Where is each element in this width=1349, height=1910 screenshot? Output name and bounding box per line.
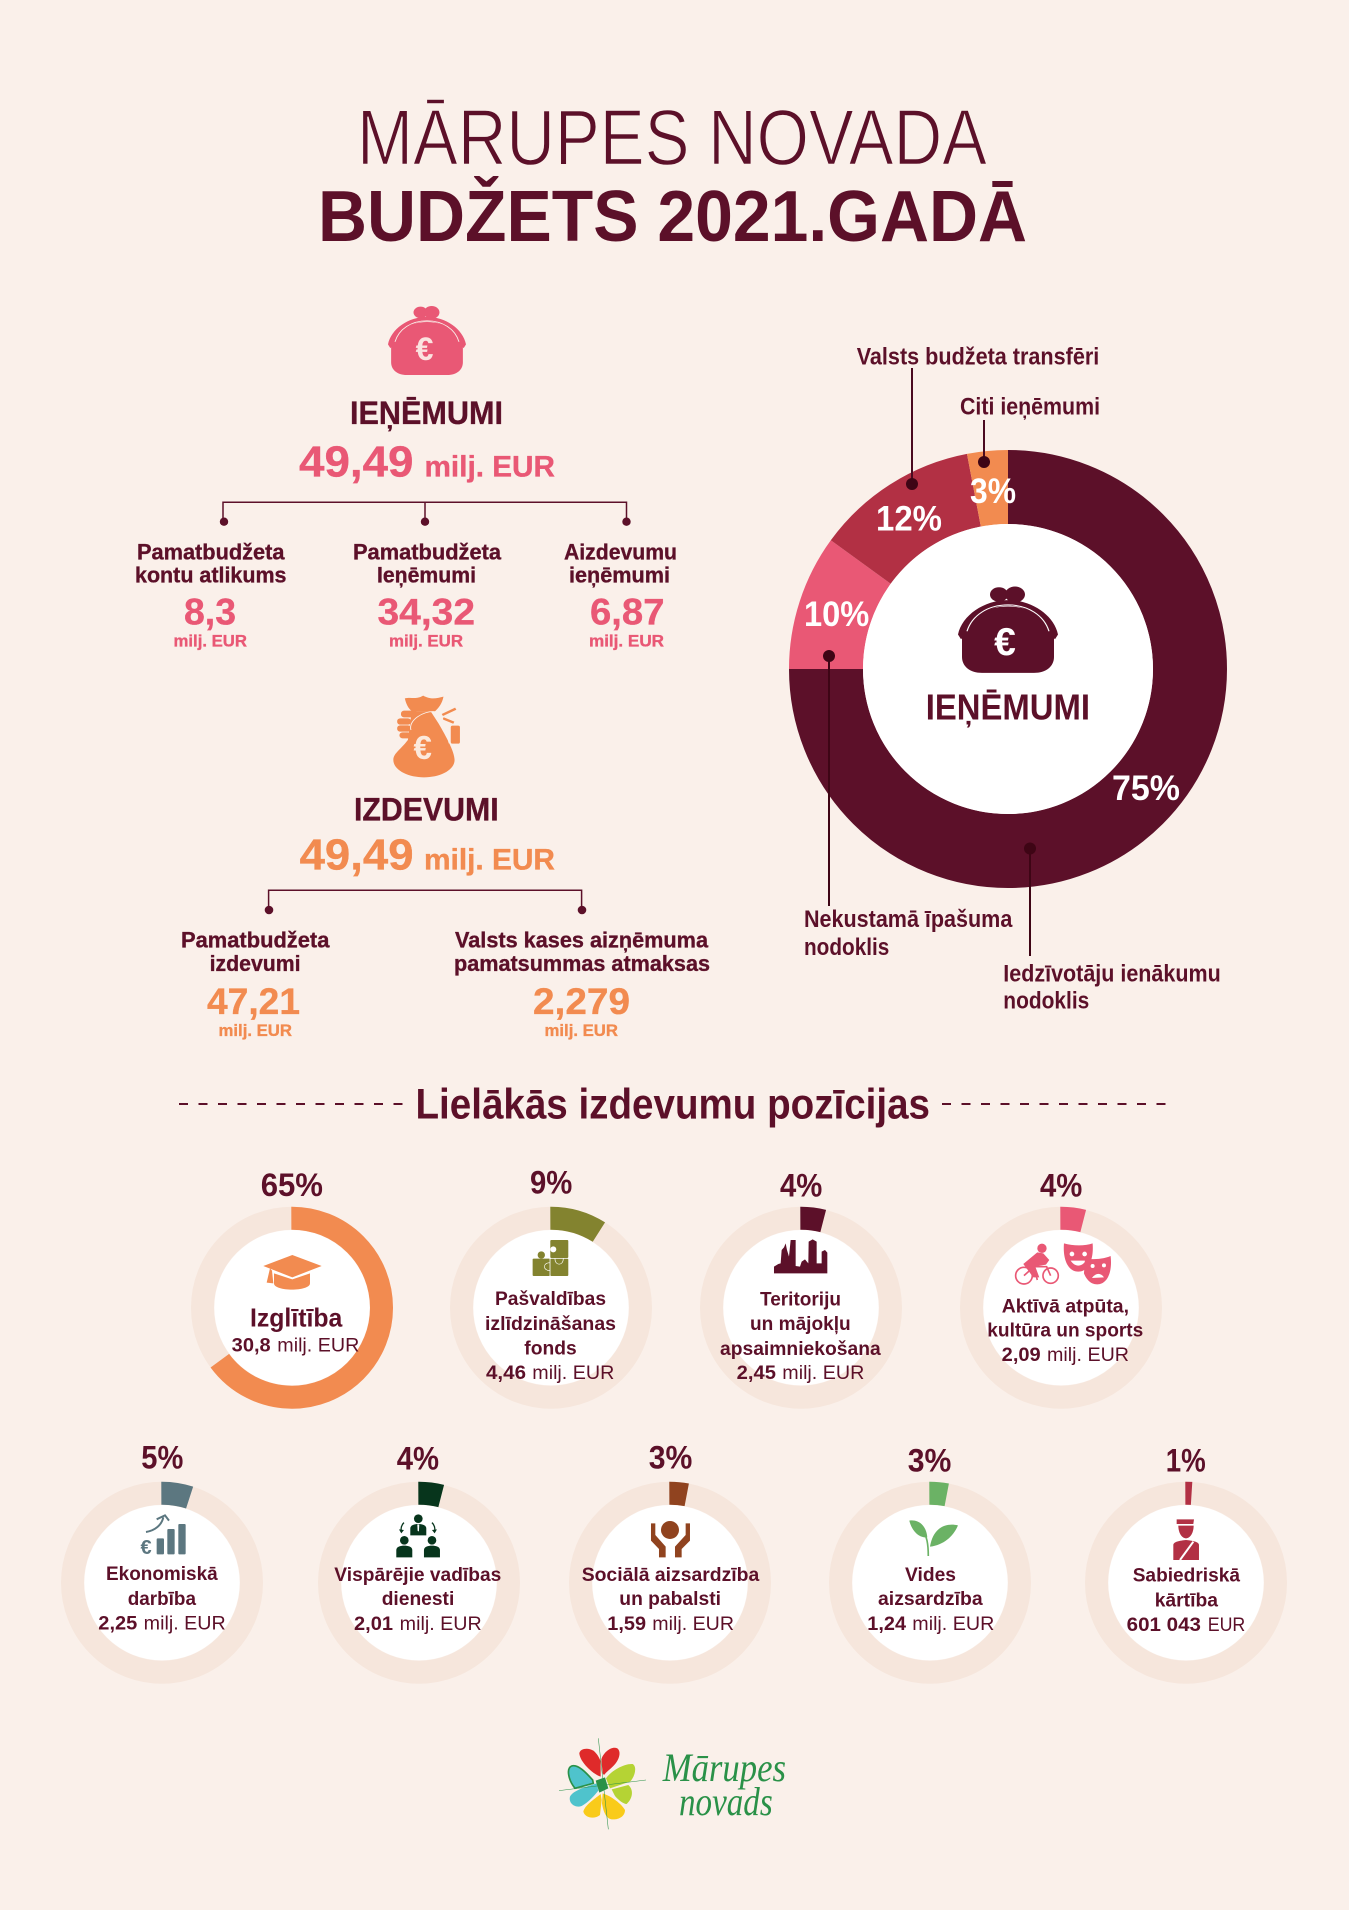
ring: education 65%: Izglītība bbox=[250, 1303, 343, 1333]
expenditure item: treasury loan repayment: Valsts kases aizņēmuma bbox=[455, 928, 709, 953]
icon: money bag bbox=[393, 696, 460, 777]
revenue total: 49,49 bbox=[299, 438, 414, 487]
expenditure tree connector bbox=[265, 890, 586, 914]
ring: environmental protection 3%: aizsardzība bbox=[878, 1588, 983, 1610]
ring: territory and housing 4%: apsaimniekošana bbox=[720, 1338, 881, 1360]
segment percentages bbox=[804, 472, 1180, 808]
ring: equalisation fund 9% bbox=[462, 1164, 640, 1397]
icon: team of people bbox=[396, 1514, 440, 1557]
callout: other revenue: Citi ieņēmumi bbox=[960, 394, 1100, 421]
segment percentages: 12% bbox=[876, 500, 942, 539]
ring: equalisation fund 9%: 9% bbox=[530, 1164, 572, 1200]
revenue item: account balance: Pamatbudžeta bbox=[137, 539, 285, 564]
ring: recreation, culture and sport 4% bbox=[972, 1168, 1150, 1397]
icon: money bag: € bbox=[414, 729, 432, 766]
icon: dark purse: € bbox=[994, 621, 1016, 664]
revenue item: base budget: milj. EUR bbox=[389, 633, 463, 651]
ring: recreation, culture and sport 4%: milj. EUR bbox=[1047, 1344, 1129, 1366]
revenue item: loans: milj. EUR bbox=[589, 633, 664, 651]
ring: general government services 4%: 4% bbox=[397, 1440, 439, 1476]
callout: property tax: nodoklis bbox=[804, 934, 889, 961]
ring: economic activity 5%: 2,25 bbox=[98, 1612, 137, 1634]
panel: revenue summary bbox=[135, 306, 677, 651]
ring: economic activity 5%: Ekonomiskā bbox=[106, 1563, 218, 1585]
ring: general government services 4%: dienesti bbox=[382, 1588, 454, 1610]
expenditure total: 49,49 bbox=[300, 830, 414, 879]
icon: euro growth chart bbox=[140, 1515, 186, 1559]
ring: public order 1%: 601 043 bbox=[1127, 1614, 1201, 1636]
ring: territory and housing 4%: 4% bbox=[780, 1168, 822, 1204]
ring: economic activity 5%: milj. EUR bbox=[144, 1612, 226, 1634]
expenditure item: treasury loan repayment: pamatsummas atmaksas bbox=[454, 951, 710, 976]
icon: plant sprout bbox=[909, 1520, 958, 1556]
revenue item: account balance: kontu atlikums bbox=[135, 563, 286, 588]
expenditure item: treasury loan repayment bbox=[454, 928, 710, 1040]
heading: expenditure: IZDEVUMI bbox=[354, 792, 499, 828]
callout: state transfers bbox=[857, 344, 1099, 490]
ring: general government services 4%: milj. EUR bbox=[400, 1613, 482, 1635]
callout: income tax bbox=[1003, 842, 1221, 1014]
ring: social protection 3%: 3% bbox=[649, 1439, 692, 1475]
ring: environmental protection 3%: 1,24 bbox=[867, 1613, 906, 1635]
icon: graduation cap bbox=[263, 1255, 322, 1290]
ring: environmental protection 3% bbox=[840, 1443, 1020, 1672]
icon: puzzle bbox=[533, 1240, 568, 1276]
panel: revenue donut chart bbox=[804, 344, 1221, 1014]
panel: expenditure summary bbox=[181, 696, 710, 1040]
ring: recreation, culture and sport 4%: Aktīvā atpūta, bbox=[1002, 1295, 1129, 1317]
donut centre bbox=[863, 524, 1153, 814]
revenue item: base budget: 34,32 bbox=[378, 590, 475, 632]
callout: other revenue bbox=[960, 394, 1100, 468]
ring: recreation, culture and sport 4%: kultūra un sports bbox=[987, 1320, 1143, 1342]
ring: environmental protection 3%: 3% bbox=[908, 1443, 951, 1479]
revenue item: account balance: milj. EUR bbox=[174, 633, 247, 651]
logo wordmark bbox=[662, 1745, 786, 1824]
expenditure item: treasury loan repayment: 2,279 bbox=[533, 980, 630, 1022]
ring: economic activity 5%: darbība bbox=[128, 1588, 196, 1610]
ring: recreation, culture and sport 4%: 2,09 bbox=[1002, 1344, 1041, 1366]
expenditure item: base budget: milj. EUR bbox=[218, 1022, 292, 1040]
ring: social protection 3%: Sociālā aizsardzība bbox=[582, 1564, 759, 1586]
revenue item: loans: ieņēmumi bbox=[569, 563, 670, 588]
ring: education 65% bbox=[202, 1167, 382, 1397]
revenue item: base budget: Pamatbudžeta bbox=[353, 539, 502, 564]
ring: economic activity 5% bbox=[72, 1439, 252, 1672]
heading: revenue: IEŅĒMUMI bbox=[350, 395, 503, 431]
icon: cyclist and theatre masks bbox=[1016, 1243, 1111, 1284]
ring: equalisation fund 9%: 4,46 bbox=[486, 1362, 526, 1384]
donut centre label: IEŅĒMUMI bbox=[926, 687, 1090, 728]
expenditure total: milj. EUR bbox=[424, 843, 555, 876]
ring: equalisation fund 9%: Pašvaldības bbox=[495, 1288, 606, 1310]
ring: environmental protection 3%: Vides bbox=[905, 1564, 956, 1586]
ring: public order 1%: 1% bbox=[1166, 1443, 1206, 1479]
expenditure total bbox=[300, 830, 555, 879]
expenditure item: base budget: 47,21 bbox=[207, 980, 300, 1022]
icon: clover emblem bbox=[559, 1738, 646, 1829]
ring: social protection 3%: 1,59 bbox=[607, 1613, 646, 1635]
revenue total bbox=[299, 438, 555, 487]
logo wordmark: novads bbox=[679, 1779, 773, 1824]
ring: social protection 3%: un pabalsti bbox=[619, 1588, 721, 1610]
ring: education 65%: 65% bbox=[261, 1167, 323, 1203]
ring: general government services 4%: 2,01 bbox=[354, 1613, 393, 1635]
ring: recreation, culture and sport 4%: 4% bbox=[1040, 1168, 1082, 1204]
segment percentages: 75% bbox=[1112, 769, 1180, 808]
ring: general government services 4%: Vispārējie vadības bbox=[334, 1564, 501, 1586]
ring: social protection 3%: milj. EUR bbox=[652, 1613, 734, 1635]
callout: property tax bbox=[804, 650, 1013, 961]
section heading: largest expenditure items: Lielākās izdevumu pozīcijas bbox=[416, 1081, 930, 1129]
icon: city skyline bbox=[774, 1239, 827, 1273]
icon: euro growth chart: € bbox=[140, 1537, 152, 1559]
revenue item: account balance: 8,3 bbox=[184, 590, 236, 632]
logo: Mārupes novads bbox=[559, 1738, 786, 1829]
callout: income tax: Iedzīvotāju ienākumu bbox=[1003, 961, 1221, 988]
segment percentages: 3% bbox=[970, 472, 1016, 511]
ring: education 65%: 30,8 bbox=[232, 1335, 271, 1357]
ring: public order 1%: kārtība bbox=[1155, 1590, 1218, 1612]
expenditure item: base budget: izdevumi bbox=[210, 951, 301, 976]
revenue item: loans: 6,87 bbox=[590, 590, 664, 632]
revenue tree connector bbox=[220, 502, 631, 526]
revenue item: loans: Aizdevumu bbox=[564, 539, 677, 564]
donut segments bbox=[826, 487, 1190, 851]
revenue item: base budget bbox=[353, 539, 502, 651]
expenditure item: base budget: Pamatbudžeta bbox=[181, 928, 330, 953]
callout: income tax: nodoklis bbox=[1003, 987, 1089, 1014]
ring: territory and housing 4%: milj. EUR bbox=[782, 1362, 864, 1384]
icon: pink purse: € bbox=[416, 331, 434, 367]
ring: territory and housing 4% bbox=[712, 1168, 890, 1397]
ring: territory and housing 4%: un mājokļu bbox=[750, 1313, 851, 1335]
revenue item: base budget: Ieņēmumi bbox=[377, 563, 476, 588]
segment percentages: 10% bbox=[804, 595, 869, 634]
revenue item: account balance bbox=[135, 539, 286, 651]
icon: caring hands bbox=[651, 1521, 690, 1557]
ring: environmental protection 3%: milj. EUR bbox=[912, 1613, 994, 1635]
ring: public order 1%: EUR bbox=[1208, 1614, 1245, 1636]
icon: dark purse bbox=[958, 586, 1058, 673]
ring: social protection 3% bbox=[580, 1439, 760, 1672]
ring: education 65%: milj. EUR bbox=[277, 1335, 359, 1357]
expenditure item: treasury loan repayment: milj. EUR bbox=[544, 1022, 618, 1040]
ring: public order 1% bbox=[1096, 1443, 1276, 1672]
ring: general government services 4% bbox=[330, 1440, 508, 1672]
expenditure item: base budget bbox=[181, 928, 330, 1040]
ring: public order 1%: Sabiedriskā bbox=[1133, 1565, 1240, 1587]
revenue item: loans bbox=[564, 539, 677, 651]
callout: property tax: Nekustamā īpašuma bbox=[804, 906, 1013, 933]
ring: economic activity 5%: 5% bbox=[141, 1439, 183, 1475]
icon: police officer bbox=[1173, 1519, 1199, 1560]
title: MĀRUPES NOVADA bbox=[357, 92, 987, 182]
title: BUDŽETS 2021.GADĀ bbox=[318, 176, 1027, 257]
ring: equalisation fund 9%: milj. EUR bbox=[532, 1362, 614, 1384]
callout: state transfers: Valsts budžeta transfēri bbox=[857, 344, 1099, 371]
ring: equalisation fund 9%: izlīdzināšanas bbox=[485, 1313, 616, 1335]
revenue total: milj. EUR bbox=[424, 451, 555, 484]
title bbox=[318, 92, 1027, 257]
ring: territory and housing 4%: Teritoriju bbox=[760, 1289, 841, 1311]
icon: pink purse bbox=[388, 306, 466, 375]
ring: territory and housing 4%: 2,45 bbox=[737, 1362, 776, 1384]
logo wordmark: Mārupes bbox=[662, 1745, 786, 1790]
ring: equalisation fund 9%: fonds bbox=[524, 1337, 577, 1359]
